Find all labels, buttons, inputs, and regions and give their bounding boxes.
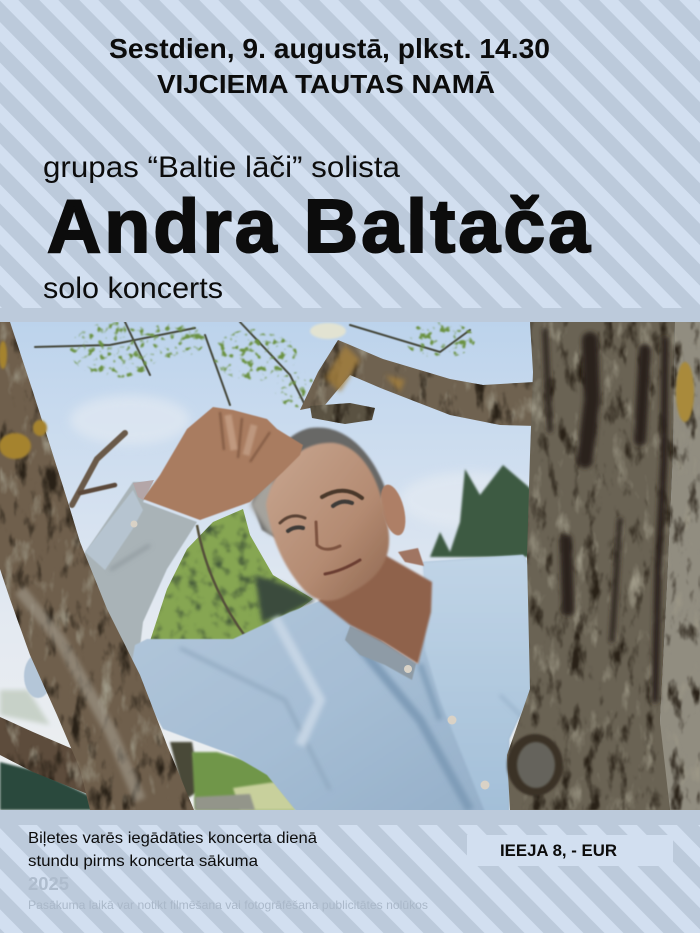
chest panel xyxy=(423,555,532,812)
lower-left woods xyxy=(0,762,95,810)
photo: man leaning between tree trunks xyxy=(0,322,700,812)
lichen on branch xyxy=(325,345,405,392)
spruce trees xyxy=(430,465,531,557)
shirt buttons xyxy=(130,520,490,790)
date and time: Sestdien, 9. augustā, plkst. 14.30 xyxy=(109,33,550,64)
collar xyxy=(345,626,416,680)
sky xyxy=(0,322,700,810)
solo concert label: solo koncerts xyxy=(43,272,223,305)
main upper branch xyxy=(300,340,537,426)
elbow behind trunk xyxy=(24,657,47,698)
far right trunk xyxy=(660,322,700,810)
hand xyxy=(143,407,303,520)
lichen xyxy=(676,362,694,422)
performer name: Andra Baltača xyxy=(47,184,591,268)
ticket information xyxy=(28,830,428,912)
ear xyxy=(380,484,406,536)
filming notice: Pasākuma laikā var notikt filmēšana vai fotogrāfēšana publicitātes nolūkos xyxy=(28,898,428,912)
right tree trunks xyxy=(507,322,700,810)
hair xyxy=(252,427,386,540)
branches and leaves at top xyxy=(35,322,537,505)
ticket information: stundu pirms koncerta sākuma xyxy=(28,853,258,870)
venue: VIJCIEMA TAUTAS NAMĀ xyxy=(157,69,495,99)
cuff xyxy=(133,480,154,500)
broken twig xyxy=(72,433,125,505)
shirt sleeve forearm xyxy=(80,482,197,672)
subtitle: grupas “Baltie lāči” solista xyxy=(43,151,401,184)
shirt folds xyxy=(110,545,525,810)
facial features xyxy=(280,491,362,574)
lower meadow xyxy=(170,742,200,800)
shirt body xyxy=(130,555,532,812)
background trees and foliage xyxy=(0,465,531,810)
header: date and venue xyxy=(109,33,550,99)
clouds xyxy=(71,394,493,522)
man xyxy=(24,407,532,812)
left tree trunk xyxy=(0,322,194,810)
central foliage xyxy=(150,509,313,641)
lighter bark streak xyxy=(20,590,140,800)
year: 2025 xyxy=(28,873,69,894)
inner collar patch xyxy=(398,548,424,566)
leaf clusters xyxy=(70,322,475,408)
bark cracks xyxy=(545,330,665,700)
bark knot xyxy=(507,734,563,796)
side stub xyxy=(310,403,375,424)
fingers xyxy=(220,412,270,462)
lichen patches xyxy=(0,341,47,459)
main right trunk xyxy=(507,322,675,810)
twigs xyxy=(35,322,470,405)
price box: IEEJA 8, - EUR xyxy=(500,842,617,860)
face xyxy=(266,443,389,601)
branch in foliage xyxy=(197,525,248,640)
price box xyxy=(467,835,673,866)
title block xyxy=(43,151,591,305)
neck xyxy=(318,555,432,664)
blossoms xyxy=(310,323,346,339)
ticket sale note: Biļetes varēs iegādāties koncerta dienā xyxy=(28,830,317,847)
